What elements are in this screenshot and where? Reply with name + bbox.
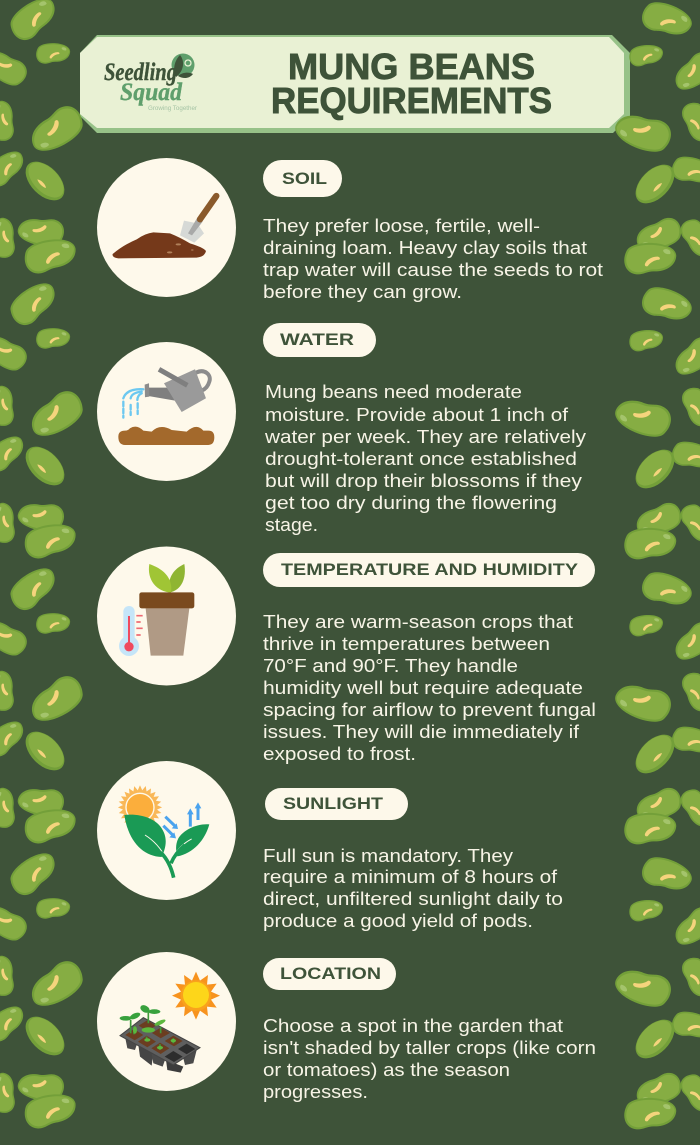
title: MUNG BEANS bbox=[288, 46, 535, 87]
title bbox=[271, 46, 552, 121]
text: soil: trap water will cause the seeds to rot bbox=[263, 260, 603, 280]
heading pill: water: WATER bbox=[280, 330, 354, 349]
text: sunlight: direct, unfiltered sunlight daily to bbox=[263, 889, 563, 909]
text: sunlight bbox=[263, 846, 563, 931]
text: temperature and humidity: spacing for airflow to prevent fungal bbox=[263, 700, 596, 720]
heading pill: sunlight: SUNLIGHT bbox=[283, 794, 384, 813]
text: water: get too dry during the flowering bbox=[265, 493, 557, 513]
section: water bbox=[263, 323, 586, 535]
text: water: stage. bbox=[265, 515, 318, 535]
text: location: progresses. bbox=[263, 1082, 368, 1102]
decorative beans: right column bbox=[611, 0, 700, 1133]
text: temperature and humidity: issues. They will die immediately if bbox=[263, 722, 580, 742]
heading pill: soil bbox=[263, 160, 342, 197]
section: temperature and humidity bbox=[263, 553, 596, 764]
logo bbox=[104, 54, 197, 112]
icon: soil and shovel bbox=[97, 158, 236, 297]
text: sunlight: produce a good yield of pods. bbox=[263, 911, 533, 931]
icon: potted plant and thermometer bbox=[97, 546, 236, 686]
text: temperature and humidity: humidity well but require adequate bbox=[263, 678, 583, 698]
title banner bbox=[80, 35, 630, 133]
text: soil: draining loam. Heavy clay soils that bbox=[263, 238, 587, 258]
heading pill: temperature and humidity bbox=[263, 553, 595, 587]
heading pill: sunlight bbox=[265, 788, 408, 820]
heading pill: temperature and humidity: TEMPERATURE AND HUMIDITY bbox=[281, 560, 579, 579]
icon: watering can bbox=[97, 342, 236, 481]
text: water: water per week. They are relatively bbox=[264, 427, 586, 447]
text: location: isn't shaded by taller crops (like corn bbox=[263, 1038, 596, 1058]
text: temperature and humidity: exposed to frost. bbox=[263, 744, 416, 764]
heading pill: location: LOCATION bbox=[280, 964, 381, 983]
section: location bbox=[263, 958, 596, 1102]
text: location bbox=[263, 1016, 596, 1102]
text: sunlight: require a minimum of 8 hours of bbox=[263, 867, 558, 887]
logo: Squad bbox=[120, 79, 182, 106]
text: water bbox=[264, 382, 586, 535]
text: temperature and humidity: thrive in temperatures between bbox=[263, 634, 550, 654]
decorative beans: left column bbox=[0, 0, 89, 1130]
heading pill: location bbox=[263, 958, 396, 990]
text: soil: before they can grow. bbox=[263, 282, 462, 302]
heading pill: soil: SOIL bbox=[282, 169, 327, 188]
heading pill: water bbox=[263, 323, 376, 357]
logo: Seedling bbox=[104, 59, 177, 86]
section: soil bbox=[263, 160, 603, 302]
section: sunlight bbox=[263, 788, 563, 931]
text: soil bbox=[263, 216, 603, 302]
text: temperature and humidity: 70°F and 90°F. They handle bbox=[263, 656, 518, 676]
text: soil: They prefer loose, fertile, well- bbox=[263, 216, 540, 236]
text: water: moisture. Provide about 1 inch of bbox=[265, 405, 569, 425]
logo: Growing Together bbox=[148, 106, 197, 112]
title: REQUIREMENTS bbox=[271, 80, 552, 121]
text: location: Choose a spot in the garden that bbox=[263, 1016, 563, 1036]
text: temperature and humidity: They are warm-season crops that bbox=[263, 612, 573, 632]
text: water: drought-tolerant once established bbox=[265, 449, 577, 469]
text: location: or tomatoes) as the season bbox=[263, 1060, 510, 1080]
icon: seedling tray and sun bbox=[97, 952, 236, 1091]
text: sunlight: Full sun is mandatory. They bbox=[263, 846, 513, 866]
text: water: but will drop their blossoms if they bbox=[265, 471, 582, 491]
text: water: Mung beans need moderate bbox=[265, 382, 522, 402]
icon: sun and leaves bbox=[97, 761, 236, 900]
text: temperature and humidity bbox=[263, 612, 596, 764]
